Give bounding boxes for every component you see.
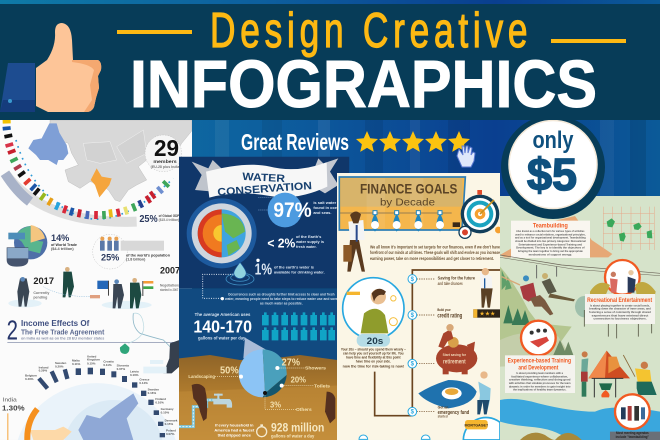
target icon xyxy=(453,190,502,238)
Europe map with country income effects: Sweden xyxy=(55,361,66,365)
Europe map with country income effects: 0.07% xyxy=(166,432,175,436)
water bottles icons xyxy=(262,312,335,340)
stat: 928 million gallons: America had a faucet xyxy=(214,428,255,433)
Europe map with country income effects: India xyxy=(3,398,18,404)
stat: 140-170 gallons: gallons of water per day xyxy=(198,335,246,340)
cacti xyxy=(192,384,335,423)
globe with trade stat xyxy=(7,225,47,267)
earth cross-section xyxy=(187,198,257,268)
banner xyxy=(0,3,660,122)
background: blue curtain stripes xyxy=(0,0,660,200)
recreational entertainment card: connection to business objectives. xyxy=(593,317,647,321)
price badge: only $5: $5 xyxy=(527,149,577,200)
experience-based training card: Is about providing team members with a xyxy=(516,371,563,375)
dollar coins: $ xyxy=(411,313,415,319)
stat: 14% of world trade: of World Trade xyxy=(51,243,77,247)
Europe map with country income effects: 0.29% xyxy=(39,369,47,373)
experience-based training card: dynamic in order for members to gain insight into xyxy=(509,384,571,388)
Europe map with country income effects: 0.16% xyxy=(148,391,156,395)
teambuilding card: mechanisms of support energy. xyxy=(529,252,572,256)
Europe map with country income effects: Belgium xyxy=(25,374,37,378)
recreational entertainment card: fostering a sense of community through shared xyxy=(589,310,651,314)
teambuilding card: should be divided into two primary categories: Recreational xyxy=(515,239,586,243)
recreational entertainment card: experiences that have minimal direct xyxy=(592,313,648,317)
negotiators timeline 2017 to 2007: 2017 xyxy=(33,276,54,286)
river xyxy=(500,399,660,440)
meeting icon circle xyxy=(610,394,660,440)
pie labels: Toilets xyxy=(314,384,330,390)
stat: 25% global GDP: 25% xyxy=(139,214,158,225)
Europe map with country income effects: Kingdom xyxy=(87,358,100,362)
Europe map with country income effects: Slovenia xyxy=(117,364,129,368)
stat: 1%: available for drinking water. xyxy=(274,269,325,274)
meeting agenda text: include "teambuilding" xyxy=(616,435,649,439)
intro paragraph xyxy=(370,244,500,261)
world map xyxy=(50,120,192,202)
recreational entertainment card: Is about playing together to create social bonds, xyxy=(590,303,650,307)
recreational entertainment card xyxy=(585,294,655,324)
title ribbon xyxy=(192,158,338,199)
hills and forest xyxy=(500,267,575,367)
experience icon circle xyxy=(521,321,556,355)
stat: 25% global GDP: of Global GDP xyxy=(159,214,180,218)
pie labels: 20% xyxy=(291,375,307,385)
stat: 928 million gallons: If every household in xyxy=(215,423,254,428)
20s text: can help you set yourself up for life. You xyxy=(343,352,404,356)
emergency fund puddle: emergency fund xyxy=(438,410,470,416)
Europe map with country income effects: 0.10% xyxy=(161,410,169,414)
stat: 928 million gallons: gallons of water a day xyxy=(271,433,315,438)
Europe map with country income effects: United xyxy=(87,355,96,359)
camp trees xyxy=(553,340,573,355)
stat: 97%: 97% xyxy=(273,198,312,222)
Europe map with country income effects: 0.40% xyxy=(25,377,34,381)
stat: 29 members xyxy=(145,135,182,172)
dollar coins: $ xyxy=(411,277,415,283)
India on map xyxy=(91,168,112,197)
panel: finance goals xyxy=(337,173,502,440)
stat: 1%: 1% xyxy=(255,262,272,279)
Europe map with country income effects: 1.30% xyxy=(2,404,25,413)
heading: 2 income effects xyxy=(7,320,174,343)
step: credit rating: credit rating xyxy=(437,313,462,320)
title: infographics: INFOGRAPHICS xyxy=(130,47,597,122)
icon: thumbs up xyxy=(0,23,101,112)
panel: teambuilding xyxy=(500,196,660,440)
stat: 14% of world trade: 14% xyxy=(51,233,69,243)
teambuilding card: used to enhance social relations, organizational principles, xyxy=(515,232,586,236)
meeting agenda text: Most meeting agendas xyxy=(616,431,649,435)
experience-based training card: facilitated experience where collaboration, xyxy=(511,374,568,378)
stat: 25% global GDP: ($15.4 trillion) xyxy=(159,218,179,222)
population people icons: 25% xyxy=(101,253,120,263)
20s text: have time on your side. xyxy=(356,360,391,364)
businessman with bag xyxy=(343,211,365,272)
price badge: only $5: only xyxy=(532,127,574,154)
population people icons: (1.8 billion) xyxy=(126,258,146,262)
experience-based training card: with activities that simulate processes for the team xyxy=(508,381,571,385)
Europe map with country income effects: 0.10% xyxy=(155,400,164,404)
heading: 2 income effects: Income Effects Of xyxy=(21,319,90,328)
experience-based training card: the implications of healthy team dynamics. xyxy=(513,388,567,392)
stat: 140-170 gallons: 140-170 xyxy=(193,317,252,337)
pie labels: Showers xyxy=(305,366,326,372)
trees behind card xyxy=(575,282,656,338)
emergency fund puddle: started xyxy=(438,415,448,419)
recreational entertainment card: breaking down the character of inner areas, and xyxy=(589,307,651,311)
pie labels: 27% xyxy=(282,358,300,369)
stat: under 2%: < 2% xyxy=(267,236,295,250)
heading: 2 income effects: 2 xyxy=(7,314,18,345)
yellow rule right xyxy=(551,39,626,43)
experience-based training card: Experience-based Training xyxy=(508,359,571,365)
step: saving for the future xyxy=(438,268,493,308)
recreational icon circle xyxy=(605,260,640,295)
pie labels: 3% xyxy=(270,400,282,410)
20s text: now the time for risk-taking is now! xyxy=(343,364,404,368)
teambuilding card: bringing the team together to bring out the appropriate xyxy=(518,249,583,253)
title banner: FINANCE GOALS xyxy=(360,181,457,197)
stat: 29 members: members xyxy=(153,159,177,165)
negotiators timeline 2017 to 2007: Currently xyxy=(33,291,50,295)
title ribbon: WATER xyxy=(242,171,286,185)
piggy bank retirement: Start saving for xyxy=(443,352,466,357)
dotted connector and text: Occurrences such as droughts further limit access to clean and fresh xyxy=(228,293,335,297)
faucet and pipe xyxy=(179,394,232,427)
Europe map with country income effects: 0.20% xyxy=(55,364,64,368)
dotted connector and text xyxy=(203,274,338,305)
stat: under 2%: fresh water. xyxy=(296,244,317,249)
zipline riders xyxy=(500,255,660,315)
Europe map with country income effects: Malta xyxy=(72,359,80,363)
20s text: have time and flexibility at this point xyxy=(346,356,401,360)
heading: great reviews: Great Reviews xyxy=(241,129,349,155)
step: credit rating: Build your xyxy=(437,307,451,312)
teambuilding card: Development. The key is to identify the objectives of xyxy=(516,246,585,250)
piggy bank retirement: retirement xyxy=(443,359,466,365)
stat: 29 members: 29 xyxy=(154,135,179,161)
step: credit rating xyxy=(437,307,500,320)
negotiators timeline 2017 to 2007 xyxy=(8,265,180,309)
stat: 14% of world trade: ($4.4 trillion) xyxy=(51,247,74,251)
stat: 97% xyxy=(258,193,345,227)
stat: 140-170 gallons: The average American uses xyxy=(195,312,251,317)
Europe map with country income effects: Finland xyxy=(155,397,166,401)
five star rating xyxy=(356,131,470,152)
stat: 14% of world trade xyxy=(51,233,77,251)
teambuilding card: Also known as a collective term for various types of activities xyxy=(516,229,585,233)
negotiators timeline 2017 to 2007: Negotiations xyxy=(160,284,180,288)
Europe map with country income effects xyxy=(2,355,178,440)
flow connector lines xyxy=(375,270,500,416)
hills at the bottom xyxy=(520,433,582,440)
intro paragraph: forefront of our minds at all times. These goals will shift and evolve as you increase xyxy=(370,250,500,255)
stat: 97%: found in oceans xyxy=(313,205,345,210)
20s text xyxy=(341,348,406,368)
experience-based training card: creative thinking, reflection and doing good xyxy=(509,378,571,382)
person in the 20s circle: 20s xyxy=(367,336,383,346)
icon: hand cursor xyxy=(457,146,475,167)
stat: 97%: is salt water xyxy=(313,200,337,205)
title ribbon: CONSERVATION xyxy=(217,180,312,199)
person in the 20s circle xyxy=(343,278,404,347)
Europe map with country income effects: 0.15% xyxy=(165,422,173,426)
panel: water conservation xyxy=(179,157,349,440)
man pulling money bag xyxy=(120,313,179,373)
campers xyxy=(581,351,657,397)
teambuilding card: and as a tool for organizational development. Teambuilding xyxy=(515,236,586,240)
Europe map with country income effects: Poland xyxy=(166,429,176,433)
band under flags xyxy=(5,173,137,222)
Europe map with country income effects: 0.11% xyxy=(103,363,112,367)
negotiators timeline 2017 to 2007: 2007 xyxy=(160,265,180,275)
pie labels xyxy=(188,358,330,413)
pie labels: Others xyxy=(296,407,312,413)
20s text: Your 20s – should you spend them wisely – xyxy=(341,348,406,352)
Europe map with country income effects: Latvia xyxy=(130,370,139,374)
heading: 2 income effects: on India as well as on the 28 EU member states xyxy=(21,335,105,340)
yellow rule left xyxy=(117,30,192,34)
Europe map with country income effects: Croatia xyxy=(103,360,114,364)
step: saving for the future: Saving for the future xyxy=(438,276,475,282)
pie labels: Landscaping xyxy=(188,374,215,380)
price badge: only $5 xyxy=(501,115,605,219)
mountain peak xyxy=(500,216,612,257)
tent xyxy=(588,351,630,397)
step: credit rating: ★★★ xyxy=(479,311,495,318)
piggy bank retirement xyxy=(436,324,477,374)
mortgage circle xyxy=(359,417,500,440)
stat: 140-170 gallons xyxy=(193,312,252,340)
mortgage circle: MORTGAGE? xyxy=(464,423,489,427)
stat: 97%: and seas. xyxy=(313,210,332,215)
experience-based training card: and Development xyxy=(518,365,558,371)
Europe map with country income effects: Greece xyxy=(139,378,150,382)
population people icons: of the world's population xyxy=(126,253,170,257)
Europe map with country income effects: Sweden xyxy=(148,388,159,392)
panel: EU India trade infographic xyxy=(0,120,192,440)
climbing wall xyxy=(603,207,654,250)
EU region on map xyxy=(28,123,68,165)
dollar coins: $ xyxy=(411,410,415,416)
stat: 25% global GDP xyxy=(140,214,179,222)
icon: water drop with ripples xyxy=(226,262,254,285)
title banner: by Decade xyxy=(380,198,435,209)
stat: 29 members: (EU-28 plus India) xyxy=(151,165,181,169)
stat: 928 million gallons xyxy=(214,422,324,438)
stat: under 2%: of the Earth's xyxy=(296,234,322,239)
emergency fund puddle xyxy=(418,371,491,419)
stat: 928 million gallons: 928 million xyxy=(271,422,324,435)
teambuilding card: Teambuilding xyxy=(533,224,568,230)
teambuilding card xyxy=(511,221,590,258)
intro paragraph: earning power, take on more responsibilities and get closer to retirement. xyxy=(370,256,494,261)
Europe map with country income effects: Germany xyxy=(161,407,174,411)
intro paragraph: We all know it's important to set targets for our finances, even if we don't have xyxy=(370,244,500,249)
Europe map with country income effects: 0.07% xyxy=(117,367,125,371)
negotiators timeline 2017 to 2007: pending xyxy=(33,296,47,300)
experience-based training card xyxy=(505,355,575,393)
flag arc xyxy=(2,120,173,219)
step: saving for the future: and take chances xyxy=(438,281,463,286)
Europe map with country income effects: 0.11% xyxy=(72,362,81,366)
desert landscape xyxy=(179,355,349,440)
stat: under 2%: water supply is xyxy=(295,239,325,244)
heading: 2 income effects: The Free Trade Agreement xyxy=(21,329,105,336)
stat: 1%: of the earth's water is xyxy=(274,264,315,269)
dollar coins: $ xyxy=(411,362,415,368)
dotted connector and text: as much water as possible. xyxy=(260,301,303,305)
emergency fund puddle: Get an xyxy=(438,404,449,409)
decade milestone markers xyxy=(371,211,444,232)
negotiators timeline 2017 to 2007: started in 2007 xyxy=(160,288,178,292)
Europe map with country income effects: Ireland xyxy=(39,365,49,369)
Europe map with country income effects: 0.14% xyxy=(139,381,148,385)
pie labels: 50% xyxy=(220,366,239,377)
title: design creative: Design Creative xyxy=(210,3,532,58)
drop pie chart xyxy=(239,338,287,397)
stat: 1% xyxy=(255,258,324,274)
population people icons xyxy=(93,234,170,269)
dollar coins xyxy=(408,275,417,416)
Europe map with country income effects: 0.10% xyxy=(130,373,139,377)
dotted connector and text: water, meaning people need to take steps to reduce water use and save xyxy=(224,297,338,301)
meeting agenda text xyxy=(616,431,649,439)
title banner xyxy=(339,177,465,230)
stat: under 2% xyxy=(268,236,324,248)
Europe map with country income effects: Denmark xyxy=(165,419,178,423)
teambuilding card: Entertainment and Experience-based Training and xyxy=(519,242,582,246)
Europe map with country income effects: 0.15% xyxy=(87,361,96,365)
stat: 928 million gallons: that dripped once xyxy=(218,433,252,438)
